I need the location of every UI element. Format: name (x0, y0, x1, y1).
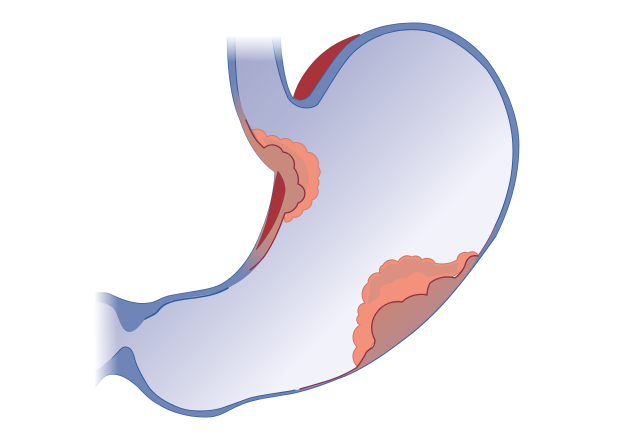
red tissue at fundus notch (293, 34, 372, 104)
stomach wall (70, 23, 519, 417)
red tissue (256, 171, 285, 250)
tumor lumps (353, 252, 478, 368)
infiltrated wall (232, 85, 305, 262)
tumor shaded lumps (262, 138, 309, 206)
esophagus fade (218, 24, 290, 62)
wall lower strip (238, 232, 272, 278)
infiltration line (246, 120, 305, 270)
outer edge line (340, 236, 496, 378)
infiltration line (300, 256, 478, 389)
duodenum fade (66, 285, 118, 403)
lesser curvature tumor (232, 85, 320, 278)
lumen inner edge lines (112, 30, 513, 411)
stomach lumen (70, 30, 513, 411)
tumor lumps (252, 129, 320, 222)
tumor base (340, 256, 478, 378)
greater curvature tumor (300, 236, 496, 389)
tumor shaded lumps (368, 259, 458, 305)
